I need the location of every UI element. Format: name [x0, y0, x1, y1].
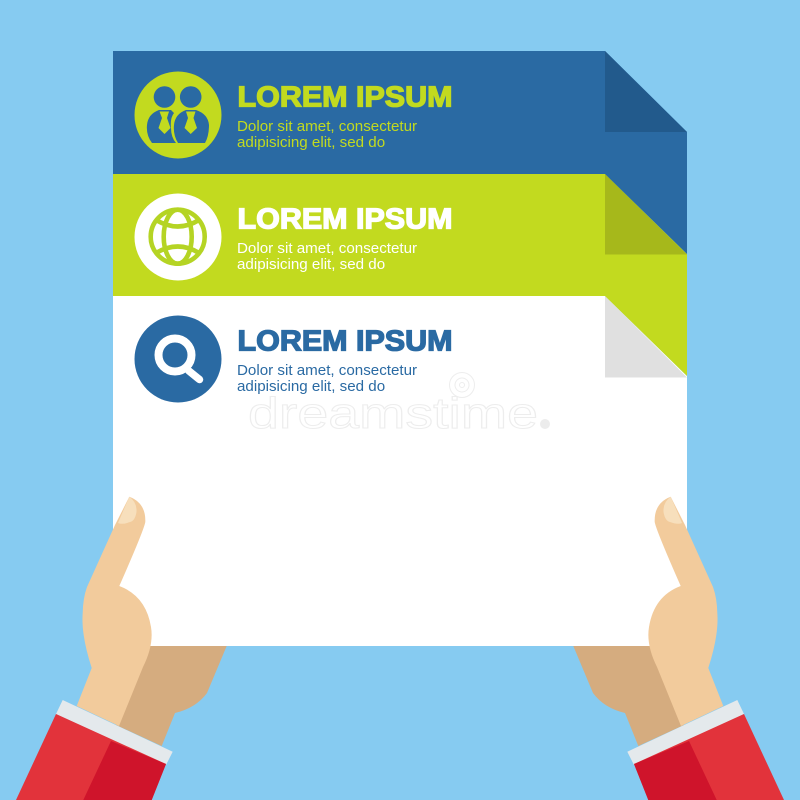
- icon: globe: [134, 194, 222, 280]
- panel: white section: [113, 296, 687, 646]
- left hand holding the sheet: [16, 497, 227, 800]
- icon: business people: [134, 72, 222, 158]
- text: green section: adipisicing elit, sed do: [237, 256, 385, 273]
- right hand holding the sheet: [573, 497, 784, 800]
- folded corner: dark green: [605, 174, 687, 254]
- watermark: dreamstime: [248, 389, 538, 438]
- folded corner: dark blue: [605, 51, 687, 132]
- heading: green section: LOREM IPSUM: [238, 204, 452, 236]
- folded corner: grey: [605, 296, 687, 378]
- heading: white section: LOREM IPSUM: [238, 326, 452, 358]
- text: blue section: Dolor sit amet, consectetur: [237, 118, 417, 135]
- watermark: [248, 372, 550, 438]
- heading: blue section: LOREM IPSUM: [238, 82, 452, 114]
- panel: blue section: [113, 51, 687, 254]
- text: green section: Dolor sit amet, consectetur: [237, 240, 417, 257]
- text: white section: adipisicing elit, sed do: [237, 378, 385, 395]
- icon: magnifying glass: [134, 316, 222, 402]
- panel: green section: [113, 174, 687, 376]
- text: white section: Dolor sit amet, consectetur: [237, 362, 417, 379]
- text: blue section: adipisicing elit, sed do: [237, 134, 385, 151]
- panel: paper sheet: [113, 51, 687, 646]
